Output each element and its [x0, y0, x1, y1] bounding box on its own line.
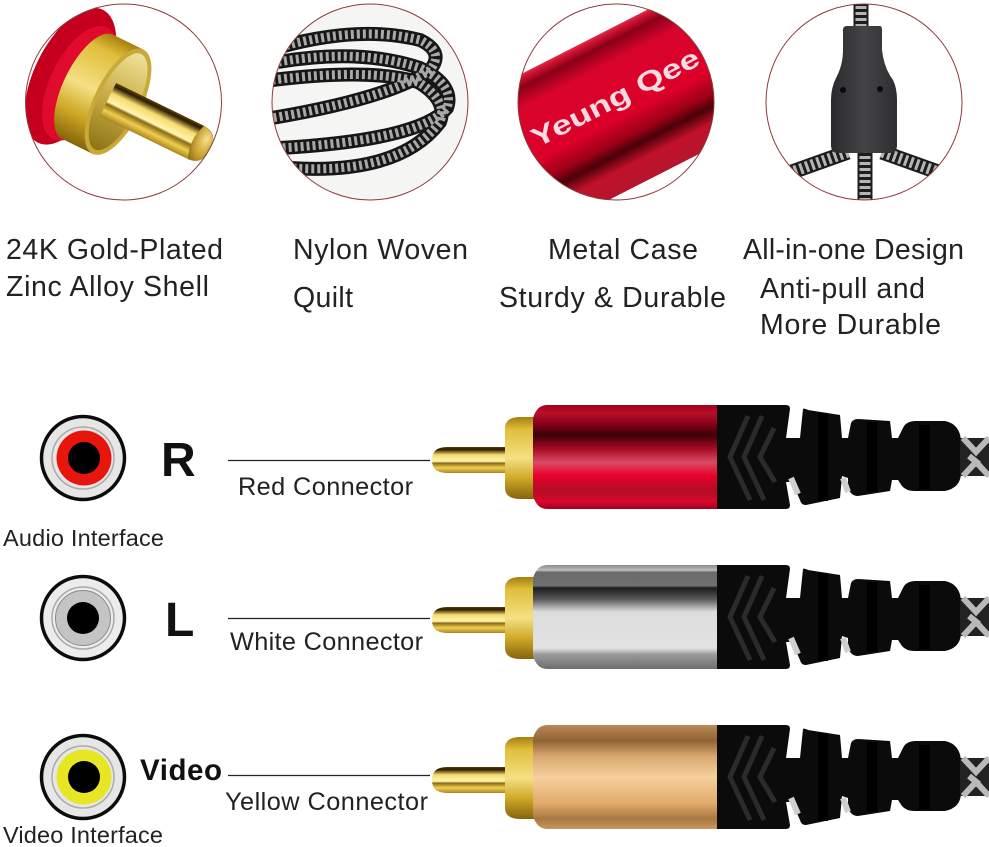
caption: all-in-one: All-in-one Design	[743, 234, 964, 266]
text: Yellow Connector: Yellow Connector	[225, 788, 428, 816]
circle outline 1	[26, 4, 222, 200]
label: Video: Video	[140, 754, 222, 787]
socket: yellow	[42, 736, 124, 818]
socket: white	[42, 576, 124, 660]
photo: red metal case	[518, 10, 714, 200]
brand mark: Yeung Qee	[526, 43, 705, 153]
leader line yellow	[228, 774, 430, 776]
caption: metal case: Metal Case	[548, 234, 698, 266]
circle outline 4	[766, 4, 962, 200]
circle outline 3	[518, 4, 714, 200]
caption: nylon: Quilt	[293, 282, 353, 314]
plug: white	[432, 565, 989, 669]
caption: gold-plated: 24K Gold-Plated	[6, 234, 223, 266]
label: L: L	[165, 594, 194, 647]
caption: all-in-one: Anti-pull and	[760, 273, 925, 305]
caption: metal case	[499, 234, 726, 314]
leader line red	[228, 460, 430, 462]
caption: all-in-one	[743, 234, 964, 341]
photo: gold-plated tip	[26, 8, 214, 161]
text: Red Connector: Red Connector	[238, 473, 413, 501]
leader line white	[228, 618, 430, 620]
photo: braided nylon cable	[270, 0, 470, 205]
socket: red	[42, 416, 124, 500]
caption: nylon: Nylon Woven	[293, 234, 468, 266]
label: R: R	[161, 434, 196, 487]
caption: all-in-one: More Durable	[760, 309, 941, 341]
caption: gold-plated	[6, 234, 223, 303]
plug: red	[432, 405, 989, 509]
text: Audio Interface: Audio Interface	[3, 525, 164, 551]
caption: metal case: Sturdy & Durable	[499, 282, 726, 314]
plug: yellow	[432, 725, 989, 829]
circle outline 2	[272, 4, 468, 200]
caption: gold-plated: Zinc Alloy Shell	[6, 271, 209, 303]
caption: nylon	[293, 234, 468, 314]
text: White Connector: White Connector	[230, 628, 423, 656]
photo: all-in-one splitter	[792, 0, 938, 205]
